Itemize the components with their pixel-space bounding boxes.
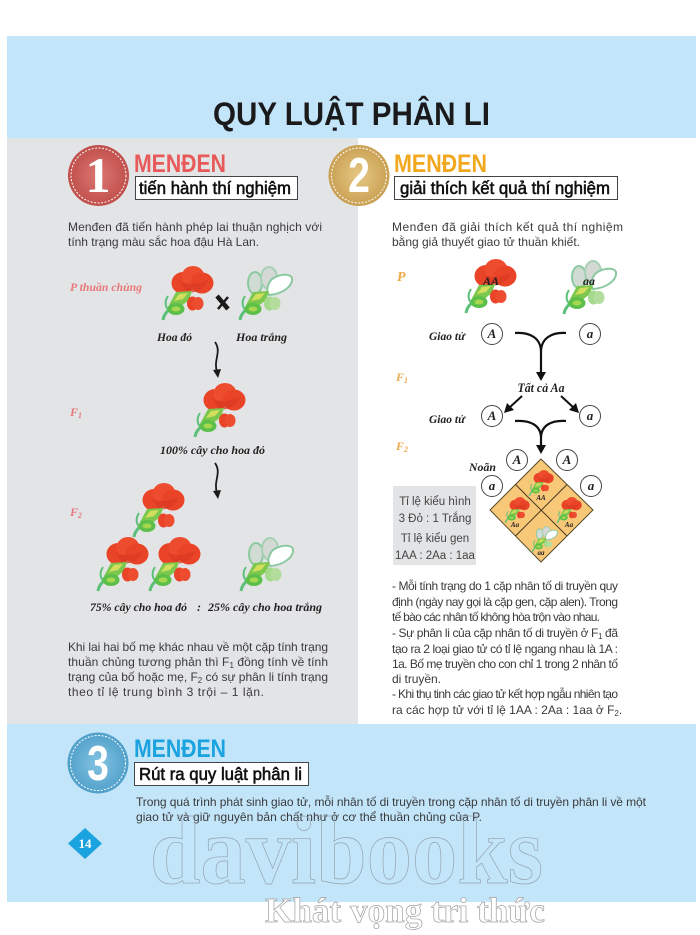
label: F2: F xyxy=(396,439,404,453)
flower: white parent xyxy=(240,267,292,320)
intro text: bằng giả thuyết giao tử thuần khiết. xyxy=(392,234,580,249)
cell: Aa right: Aa xyxy=(564,521,574,529)
egg A right xyxy=(556,450,578,470)
flowers: F2 group xyxy=(98,483,293,591)
ratio box: Tỉ lệ kiểu gen xyxy=(401,533,469,545)
badge: number 1: 1 xyxy=(86,147,110,203)
egg A left xyxy=(506,450,528,470)
label: F2 ratio xyxy=(90,600,322,614)
arrow: merge to F2 xyxy=(515,421,566,454)
conclusion text xyxy=(136,794,647,824)
panel: step 3 conclusion xyxy=(7,724,696,902)
panel: step 1 experiment xyxy=(7,138,358,724)
label: gametes F1: Giao tử xyxy=(429,412,466,426)
conclusion text: có sự phân li tính trạng xyxy=(202,670,328,684)
label: F2 ratio: : xyxy=(197,600,201,614)
label: Hoa trắng: Hoa trắng xyxy=(235,330,287,344)
explanation text: 1 xyxy=(598,632,603,641)
cell: Aa left: Aa xyxy=(510,521,520,529)
explanation text: 2 xyxy=(614,709,619,718)
egg a right xyxy=(580,476,602,496)
label: Hoa đỏ: Hoa đỏ xyxy=(156,330,192,344)
gamete A xyxy=(482,324,502,344)
explanation text: ra các hợp tử với tỉ lệ 1AA : 2Aa : 1aa ở F xyxy=(392,703,614,717)
conclusion text: thuần chủng tương phản thì F xyxy=(68,655,229,669)
label: F1: 1 xyxy=(404,376,408,385)
label: F1: 1 xyxy=(78,411,82,420)
explanation text: tế bào các nhân tố không hòa trộn vào nhau. xyxy=(392,610,600,624)
cell: AA: AA xyxy=(535,494,546,502)
watermark: tagline: Khát vọng tri thức xyxy=(265,891,545,930)
conclusion text: theo tỉ lệ trung bình 3 trội – 1 lặn. xyxy=(68,685,264,699)
flower: AA parent: AA xyxy=(482,274,499,288)
label: gametes P: Giao tử xyxy=(429,329,466,343)
conclusion text: giao tử và giữ nguyên bản chất như ở cơ thể thuần chủng của P. xyxy=(136,810,482,824)
label: F2 ratio: 75% cây cho hoa đỏ xyxy=(90,600,187,614)
badge: number 2 xyxy=(328,145,390,206)
intro text xyxy=(68,220,322,249)
arrow: F1 to F2 xyxy=(213,463,221,499)
badge: number 3: 3 xyxy=(87,737,109,791)
panel: step 2 explanation xyxy=(328,145,623,718)
label: P: P xyxy=(397,270,406,285)
arrow: merge to F1 xyxy=(515,333,566,381)
gamete A xyxy=(482,406,502,426)
conclusion text: đồng tính về tính xyxy=(234,655,328,669)
explanation text: định (ngày nay gọi là cặp gen, cặp alen). Trong xyxy=(392,595,618,609)
panel: top title band xyxy=(7,36,696,138)
explanation text xyxy=(392,578,622,718)
heading: Menđen: MENĐEN xyxy=(134,735,226,763)
arrow: split left xyxy=(504,396,522,413)
conclusion text xyxy=(68,640,328,699)
conclusion text: Khi lai hai bố mẹ khác nhau về một cặp tính trạng xyxy=(68,640,328,654)
explanation text: - Sự phân li của cặp nhân tố di truyền ở F xyxy=(392,626,598,640)
ratio box xyxy=(393,486,476,565)
label: F2: F xyxy=(70,505,78,519)
ratio box: 1AA : 2Aa : 1aa xyxy=(395,550,476,562)
label: Noãn: Noãn xyxy=(468,460,496,474)
ratio box: 3 Đỏ : 1 Trắng xyxy=(399,512,471,525)
gamete A: A xyxy=(487,408,497,423)
explanation text: đã xyxy=(602,626,618,640)
conclusion text: 2 xyxy=(198,676,203,685)
egg a left xyxy=(482,476,502,496)
conclusion text: trạng của bố hoặc mẹ, F xyxy=(68,670,198,684)
ratio box: Tỉ lệ kiểu hình xyxy=(399,496,471,508)
gamete a xyxy=(580,324,600,344)
egg a left: a xyxy=(489,478,496,493)
gamete a: a xyxy=(587,326,594,341)
badge: number 1 xyxy=(68,145,129,206)
page number badge: 14 xyxy=(78,836,92,851)
intro text: Menđen đã giải thích kết quả thí nghiệm xyxy=(392,220,623,234)
subheading box: giải thích kết quả thí nghiệm: giải thích kết quả thí nghiệm xyxy=(400,178,610,198)
explanation text: - Khi thụ tinh các giao tử kết hợp ngẫu nhiên tạo xyxy=(392,686,618,701)
heading: Menđen: MENĐEN xyxy=(134,150,226,178)
intro text: tính trạng màu sắc hoa đậu Hà Lan. xyxy=(68,234,259,249)
conclusion text: 1 xyxy=(229,661,234,670)
title: QUY LUẬT PHÂN LI xyxy=(213,96,490,132)
arrow: split right xyxy=(561,396,579,413)
label: F2: 2 xyxy=(403,445,408,454)
cross mark xyxy=(217,296,228,309)
gamete A: A xyxy=(487,326,497,341)
label: F2: 2 xyxy=(77,511,82,520)
explanation text: 1a. Bố mẹ truyền cho con chỉ 1 trong 2 nhân tố xyxy=(392,657,618,671)
flower: F1 red xyxy=(195,383,246,437)
gamete a xyxy=(580,406,600,426)
label: F2 ratio: 25% cây cho hoa trắng xyxy=(207,600,322,614)
subheading box: tiến hành thí nghiệm: tiến hành thí nghiệm xyxy=(139,178,291,198)
Punnett square xyxy=(490,459,593,562)
cell: aa: aa xyxy=(538,549,545,557)
intro text xyxy=(392,220,623,249)
gamete a: a xyxy=(587,408,594,423)
egg a right: a xyxy=(588,478,595,493)
conclusion text: Trong quá trình phát sinh giao tử, mỗi nhân tố di truyền trong cặp nhân tố di truyền phân li về một xyxy=(136,794,647,809)
flower: red parent xyxy=(163,266,214,320)
badge: number 3 xyxy=(68,732,128,794)
flower: aa parent xyxy=(564,261,616,314)
label: F1: F xyxy=(70,405,78,419)
label: 100% red: 100% cây cho hoa đỏ xyxy=(160,443,265,457)
egg A left: A xyxy=(512,452,522,467)
arrow: P to F1 xyxy=(213,342,221,378)
label: F1: F xyxy=(396,370,404,384)
explanation text: tạo ra 2 loại giao tử có tỉ lệ ngang nhau là 1A : xyxy=(392,642,618,656)
explanation text: - Mỗi tính trạng do 1 cặp nhân tố di truyền quy xyxy=(392,578,618,593)
explanation text: . xyxy=(619,703,622,717)
watermark: davibooks: davibooks xyxy=(150,797,543,904)
flower: AA parent xyxy=(466,259,516,313)
heading: Menđen: MENĐEN xyxy=(394,150,487,178)
subheading box: Rút ra quy luật phân li: Rút ra quy luật phân li xyxy=(139,764,302,784)
badge: number 2: 2 xyxy=(348,149,370,203)
intro text: Menđen đã tiến hành phép lai thuận nghịch với xyxy=(68,220,322,234)
explanation text: di truyền. xyxy=(392,672,441,686)
label: P thuần chủng: P thuần chủng xyxy=(70,280,142,294)
egg A right: A xyxy=(562,452,572,467)
flower: aa parent: aa xyxy=(583,274,595,288)
label: all Aa: Tất cả Aa xyxy=(518,380,565,395)
page number badge xyxy=(68,828,102,859)
